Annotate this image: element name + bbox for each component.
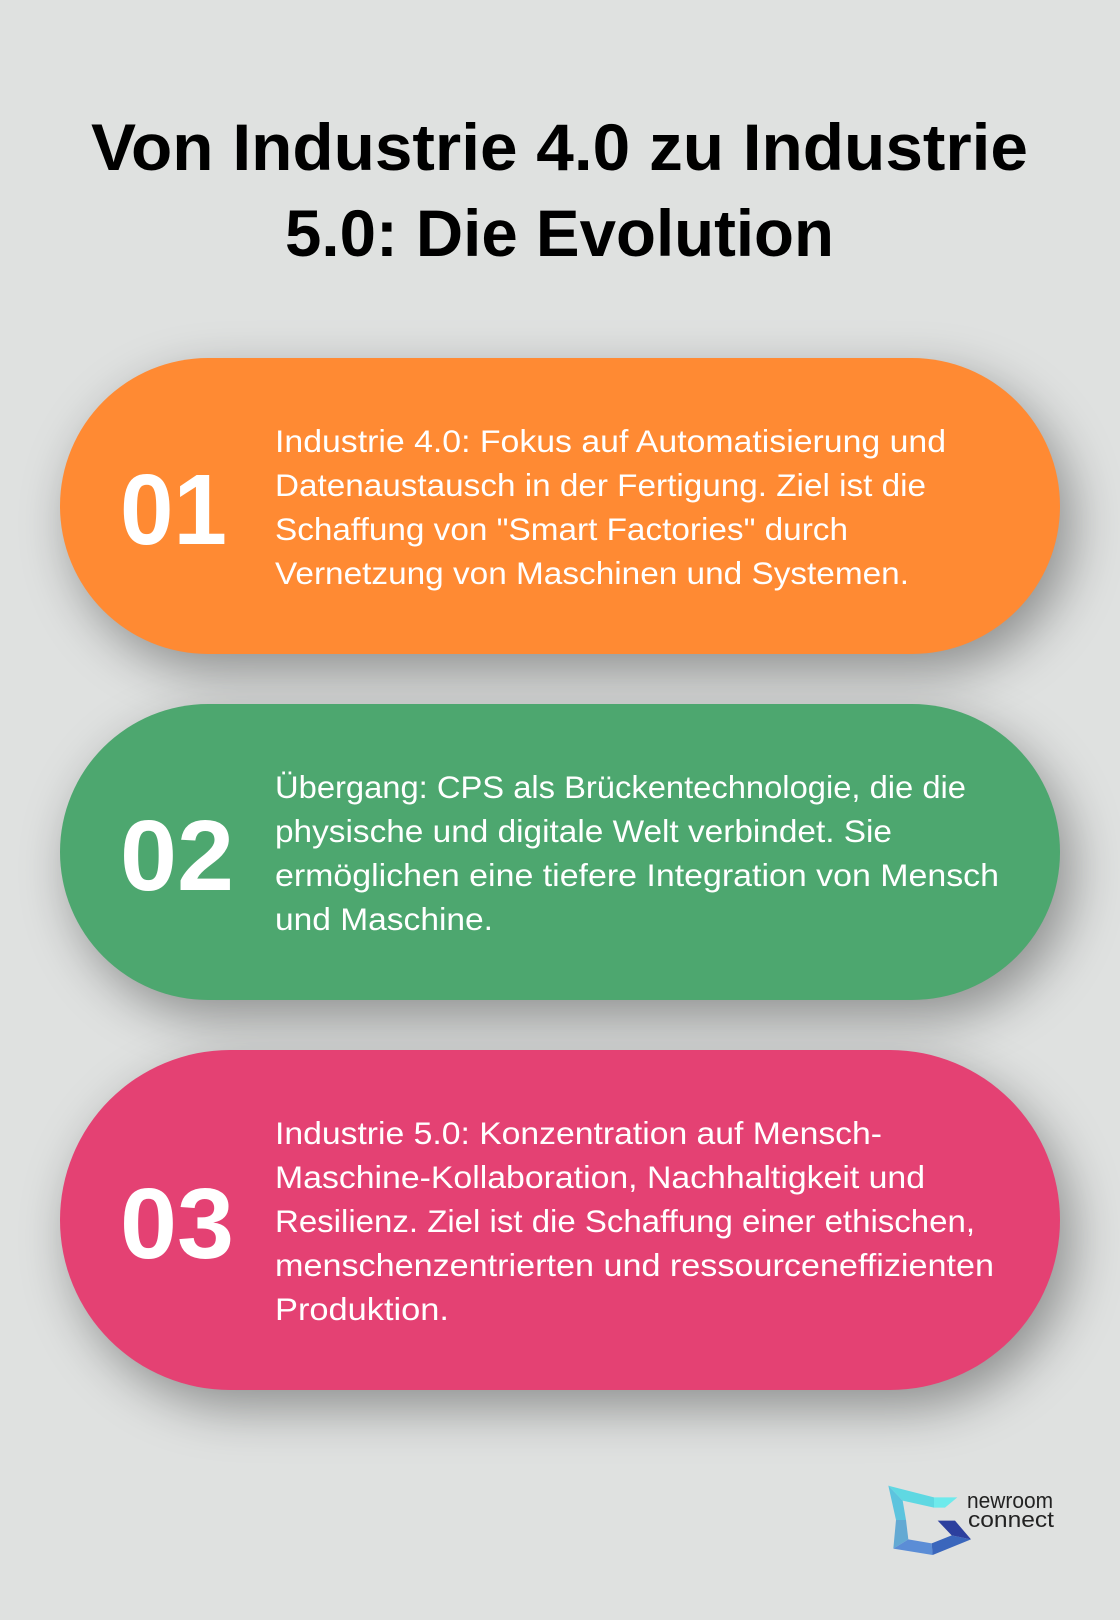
text block: card 01: Schaffung von "Smart Factories" durch	[275, 511, 848, 547]
text block: card 02: physische und digitale Welt verbindet. Sie	[275, 813, 892, 849]
text block: card 03: Produktion.	[275, 1291, 449, 1327]
logo wordmark	[967, 1488, 1054, 1532]
number 01: 01	[120, 454, 227, 566]
text block: card 03: Industrie 5.0: Konzentration auf Mensch-	[275, 1115, 882, 1151]
text block: card 01: Vernetzung von Maschinen und Systemen.	[275, 555, 909, 591]
text block: card 02: ermöglichen eine tiefere Integration von Mensch	[275, 857, 999, 893]
logo wordmark: newroom	[967, 1488, 1053, 1513]
text block: card 03: Maschine-Kollaboration, Nachhaltigkeit und	[275, 1159, 925, 1195]
panel: card 03 pink	[60, 1050, 1060, 1390]
text block: card 03: menschenzentrierten und ressourceneffizienten	[275, 1247, 994, 1283]
text block: card 03	[275, 1115, 994, 1327]
text block: card 02: und Maschine.	[275, 901, 493, 937]
icon: logo mark	[888, 1486, 971, 1555]
text block: card 02	[275, 769, 999, 937]
logo wordmark: connect	[968, 1507, 1054, 1532]
text block: card 01	[275, 423, 946, 591]
logo: newroom connect	[888, 1486, 1054, 1555]
panel: card 01 orange	[60, 358, 1060, 654]
number 03: 03	[120, 1168, 234, 1280]
title	[91, 110, 1028, 270]
title: Von Industrie 4.0 zu Industrie	[91, 110, 1028, 184]
panel: card 02 green	[60, 704, 1060, 1000]
text block: card 02: Übergang: CPS als Brückentechnologie, die die	[275, 769, 966, 805]
text block: card 01: Datenaustausch in der Fertigung. Ziel ist die	[275, 467, 926, 503]
title: 5.0: Die Evolution	[285, 196, 834, 270]
text block: card 01: Industrie 4.0: Fokus auf Automatisierung und	[275, 423, 946, 459]
text block: card 03: Resilienz. Ziel ist die Schaffung einer ethischen,	[275, 1203, 975, 1239]
number 02: 02	[120, 800, 234, 912]
